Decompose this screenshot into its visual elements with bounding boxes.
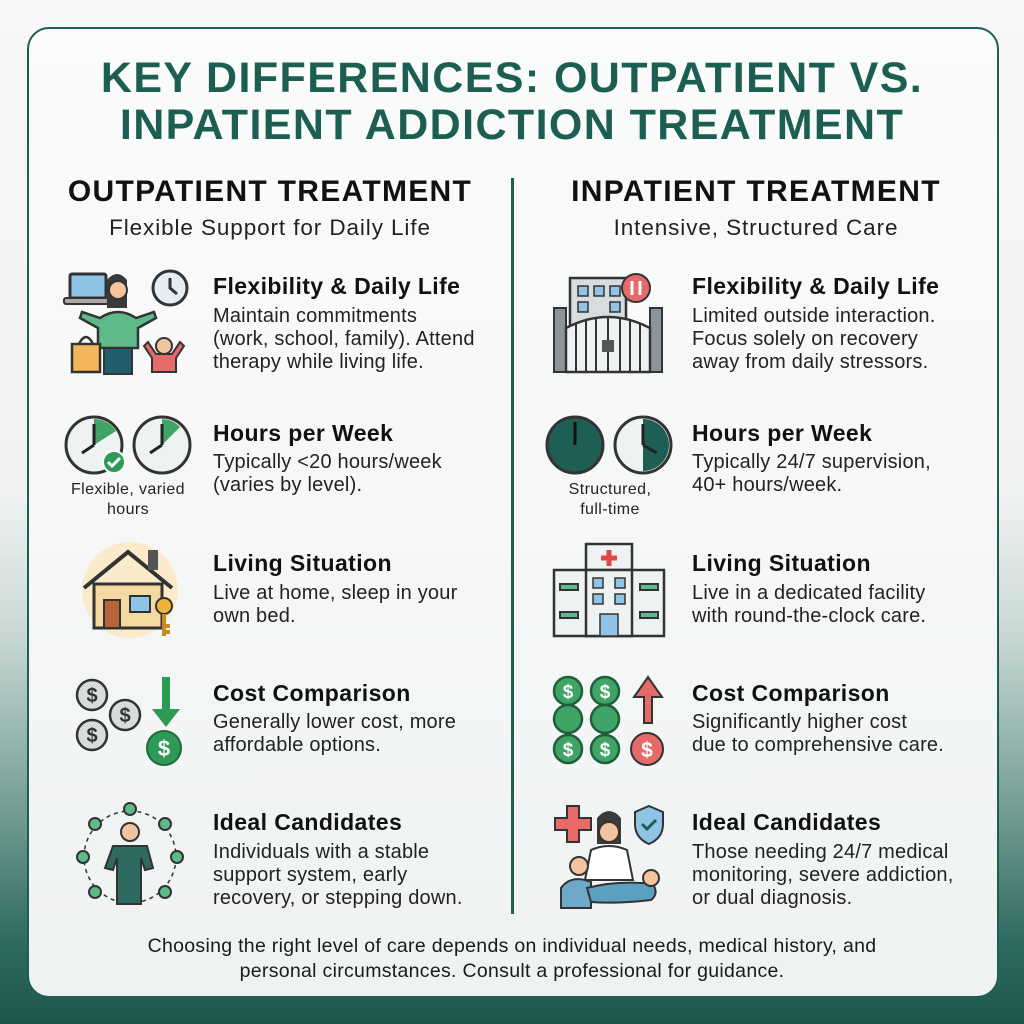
text: Limited outside interaction. [692, 305, 936, 327]
text: Live in a dedicated facility [692, 582, 926, 604]
icon: coins with down arrow: $ [86, 725, 98, 747]
text: hours inpatient: Hours per Week [692, 420, 872, 446]
text: due to comprehensive care. [692, 734, 944, 756]
text: flexibility inpatient: Flexibility & Daily Life [692, 273, 939, 299]
icon: coin stacks with up arrow: $ [563, 740, 574, 761]
caption: structured full-time: Structured, [569, 481, 651, 498]
icon: coins with down arrow: $ [158, 736, 170, 761]
text: recovery, or stepping down. [213, 887, 463, 909]
footer note: Choosing the right level of care depends on individual needs, medical history, and [148, 935, 876, 957]
icon: coin stacks with up arrow: $ [600, 740, 611, 761]
icon: coin stacks with up arrow: $ [641, 739, 653, 762]
title: KEY DIFFERENCES: OUTPATIENT VS. [101, 54, 923, 102]
icon: two full clocks [546, 416, 672, 474]
footer note [148, 935, 876, 982]
icon: coin stacks with up arrow: $ [600, 682, 611, 703]
icon: coins with down arrow [76, 677, 182, 766]
title [101, 54, 923, 149]
left column header: OUTPATIENT TREATMENT [68, 175, 472, 208]
footer note: personal circumstances. Consult a professional for guidance. [240, 960, 784, 982]
icon: person with laptop, clock, bag, child [63, 270, 188, 375]
text: living inpatient: Living Situation [692, 550, 871, 576]
text: support system, early [213, 864, 407, 886]
text: candidates inpatient: Ideal Candidates [692, 809, 881, 835]
caption: flexible hours [71, 481, 185, 518]
text: affordable options. [213, 734, 381, 756]
caption: flexible hours: hours [107, 501, 149, 518]
text: with round-the-clock care. [692, 605, 926, 627]
icon: coin stacks with up arrow: $ [563, 682, 574, 703]
caption: structured full-time [569, 481, 651, 518]
text: (work, school, family). Attend [213, 328, 475, 350]
icon: hospital facility [552, 542, 666, 638]
text: cost inpatient: Cost Comparison [692, 680, 890, 706]
icon: house with key [82, 542, 178, 638]
icon: person with network [76, 802, 184, 905]
text: Focus solely on recovery [692, 328, 918, 350]
text: cost outpatient: Cost Comparison [213, 680, 411, 706]
text: Typically 24/7 supervision, [692, 451, 931, 473]
text: living outpatient: Living Situation [213, 550, 392, 576]
text: or dual diagnosis. [692, 887, 852, 909]
title: INPATIENT ADDICTION TREATMENT [120, 101, 904, 149]
text: candidates outpatient: Ideal Candidates [213, 809, 402, 835]
icon: coins with down arrow: $ [119, 705, 131, 727]
text: hours outpatient: Hours per Week [213, 420, 393, 446]
text: therapy while living life. [213, 351, 424, 373]
text: Those needing 24/7 medical [692, 841, 948, 863]
icon: gated facility [553, 273, 663, 374]
text: away from daily stressors. [692, 351, 928, 373]
icon: coin stacks with up arrow [552, 675, 664, 766]
caption: structured full-time: full-time [580, 501, 640, 518]
text: 40+ hours/week. [692, 474, 842, 496]
icon: coins with down arrow: $ [86, 685, 98, 707]
text: flexibility outpatient: Flexibility & Daily Life [213, 273, 460, 299]
icon: doctor with patient [554, 804, 664, 909]
text: (varies by level). [213, 474, 362, 496]
text: Live at home, sleep in your [213, 582, 457, 604]
right column subtitle: Intensive, Structured Care [614, 215, 898, 240]
caption: flexible hours: Flexible, varied [71, 481, 185, 498]
text: monitoring, severe addiction, [692, 864, 954, 886]
text: Typically <20 hours/week [213, 451, 442, 473]
text: own bed. [213, 605, 296, 627]
text: Significantly higher cost [692, 711, 907, 733]
divider [511, 178, 514, 914]
text: Individuals with a stable [213, 841, 429, 863]
icon: two clocks partial [64, 416, 192, 474]
left column subtitle: Flexible Support for Daily Life [109, 215, 431, 240]
text: Generally lower cost, more [213, 711, 456, 733]
right column header: INPATIENT TREATMENT [571, 175, 941, 208]
text: Maintain commitments [213, 305, 417, 327]
